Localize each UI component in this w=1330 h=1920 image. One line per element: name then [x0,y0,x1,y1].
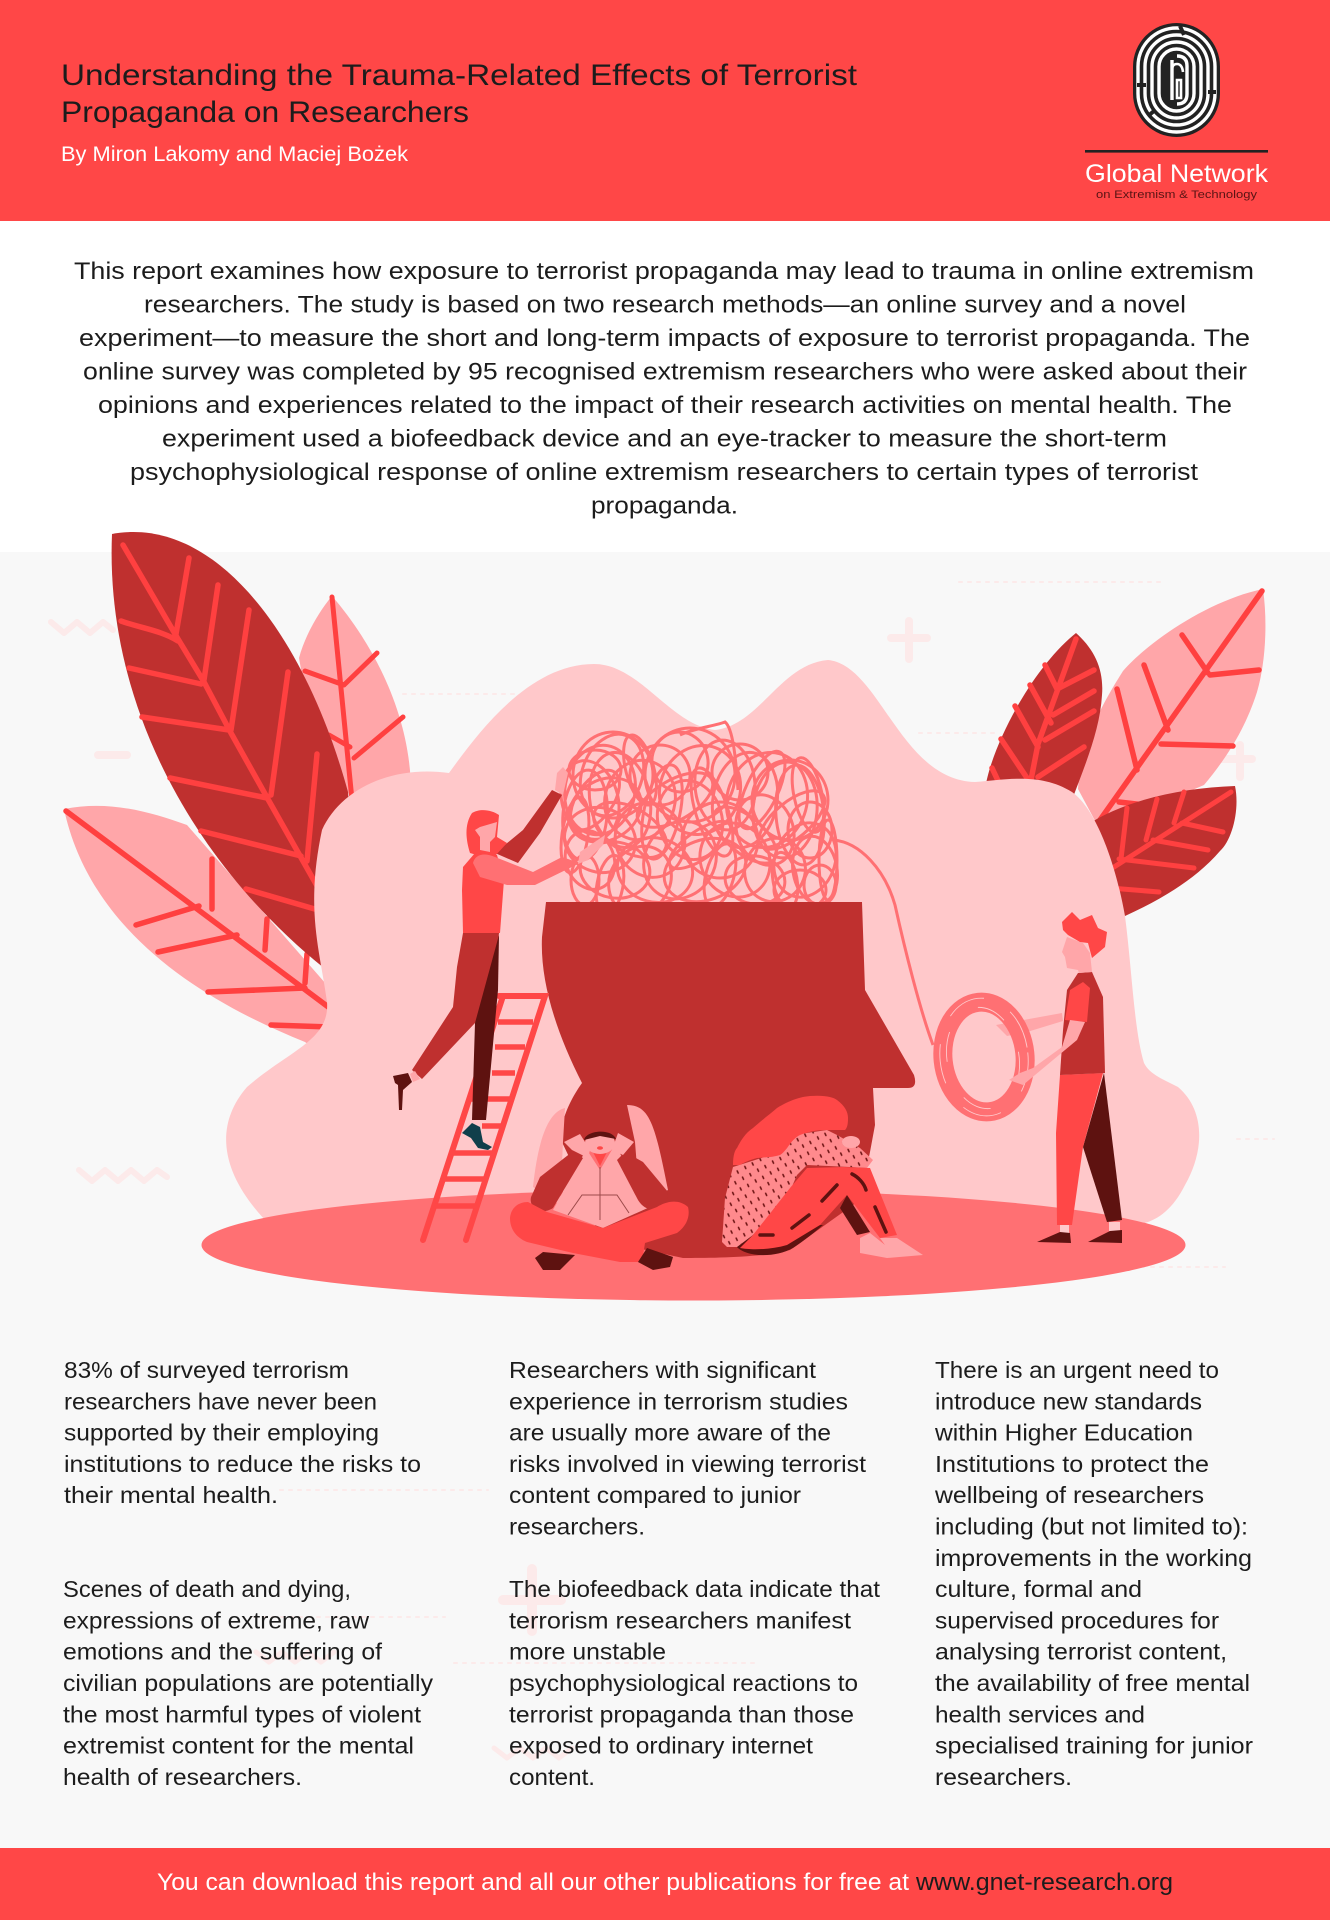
intro text block: opinions and experiences related to the impact of their research activities on mental health. The [98,392,1232,419]
finding: experience and awareness: risks involved in viewing terrorist [509,1451,867,1477]
text column 1 [63,1357,434,1790]
finding: experience and awareness: content compared to junior [509,1482,801,1508]
finding: institutional support [64,1357,421,1508]
front arm [473,855,580,885]
figure: sitting man [510,1105,689,1270]
text column 3: recommendation: within Higher Education [934,1420,1193,1446]
logo: Global Network on Extremism & Technology [1085,23,1269,201]
finding: institutional support: supported by their employing [64,1420,379,1446]
finding: experience and awareness: Researchers with significant [509,1357,817,1383]
head and hands [564,1134,590,1158]
finding: experience and awareness [509,1357,867,1540]
figure: sitting woman [722,1096,923,1258]
back leg [840,1195,870,1235]
finding: biofeedback data [509,1576,881,1790]
finding: harmful content: the most harmful types of violent [63,1701,422,1727]
legs [510,1202,689,1262]
finding: biofeedback data: more unstable [509,1639,666,1665]
finding: institutional support: researchers have never been [64,1388,377,1414]
finding: experience and awareness: experience in terrorism studies [509,1388,848,1414]
text column 3: recommendation: culture, formal and [935,1576,1142,1602]
footer band: www.gnet-research.org [915,1869,1173,1896]
finding: harmful content: extremist content for the mental [63,1733,414,1759]
intro text block: researchers. The study is based on two research methods—an online survey and a novel [144,292,1186,318]
torso [1060,972,1105,1075]
intro text block: psychophysiological response of online extremism researchers to certain types of terrorist [130,459,1198,486]
intro text block [74,258,1254,520]
leaf: pale lower left [64,806,340,1060]
byline: By Miron Lakomy and Maciej Bożek [61,143,409,166]
face [1062,937,1092,973]
finding: institutional support: institutions to reduce the risks to [64,1451,421,1477]
footer band [0,1848,1330,1920]
finding: harmful content: civilian populations are potentially [63,1670,434,1696]
trouser marks [760,1174,886,1235]
text column 2 [509,1357,881,1790]
leaf: pale right [1078,589,1265,830]
intro text block: This report examines how exposure to terrorist propaganda may lead to trauma in online extremism [74,258,1254,285]
finding: institutional support: 83% of surveyed terrorism [64,1357,349,1383]
intro text block: propaganda. [591,492,738,520]
hand [842,1136,860,1148]
jacket [553,1148,650,1228]
finding: institutional support: their mental health. [64,1482,278,1508]
logo: Global Network on Extremism & Technology: on Extremism & Technology [1096,189,1258,201]
back arm [996,1013,1063,1036]
finding: harmful content: expressions of extreme, raw [63,1607,369,1633]
intro text block: experiment used a biofeedback device and an eye-tracker to measure the short-term [162,426,1167,452]
title: Understanding the Trauma-Related Effects of Terrorist [61,59,858,92]
trousers [740,1167,897,1249]
finding: biofeedback data: content. [509,1764,595,1790]
header band [0,0,1330,221]
finding: harmful content: emotions and the suffering of [63,1639,383,1665]
shoes [535,1252,575,1270]
leaf: lower dark right [1085,786,1237,916]
text column 3: recommendation: analysing terrorist content, [935,1639,1227,1665]
leaf: small dark right [985,633,1102,800]
collar [587,1148,613,1170]
text column 3: recommendation: health services and [935,1701,1145,1727]
text column 3: recommendation: researchers. [935,1764,1072,1790]
face [475,822,497,852]
finding: biofeedback data: exposed to ordinary internet [509,1733,814,1759]
shoes [462,1123,492,1150]
figure: standing man with rope [934,912,1122,1243]
text column 3: recommendation: the availability of free mental [935,1670,1250,1696]
leaf: pale back left [299,596,411,800]
leaf: large dark left [112,532,360,968]
finding: harmful content: health of researchers. [63,1764,302,1790]
title: Propaganda on Researchers [61,96,469,129]
logo: Global Network on Extremism & Technology: Global Network [1085,160,1269,188]
ladder [423,996,545,1240]
dark leg [1083,1073,1122,1222]
text column 3: recommendation: There is an urgent need to [935,1357,1219,1383]
front arm [1009,1020,1085,1085]
finding: biofeedback data: psychophysiological reactions to [509,1670,858,1696]
finding: harmful content: Scenes of death and dying, [63,1576,351,1602]
text column 3: recommendation: introduce new standards [935,1388,1202,1414]
light leg [1056,1073,1103,1225]
text column 3: recommendation: improvements in the working [935,1545,1252,1571]
finding: harmful content [63,1576,434,1790]
text column 3: recommendation: wellbeing of researchers [934,1482,1204,1508]
rope tail [833,840,933,1045]
text column 3: recommendation: Institutions to protect the [935,1451,1209,1477]
feet [860,1233,923,1258]
back arm [495,790,562,863]
illustration [64,532,1265,1300]
rope coil [934,994,1034,1120]
pale hood [533,1105,668,1205]
tangled scribble [553,722,933,1045]
pink blob background [226,660,1199,1225]
finding: experience and awareness: researchers. [509,1514,645,1540]
finding: biofeedback data: terrorist propaganda than those [509,1701,854,1727]
hair [466,810,507,856]
text column 3: recommendation: supervised procedures for [935,1607,1219,1633]
torso [462,853,504,933]
dotted sweater [722,1130,873,1247]
sleeve [1065,982,1090,1022]
hair [733,1096,848,1165]
finding: biofeedback data: terrorism researchers manifest [509,1607,852,1633]
title [61,59,858,129]
legs [412,933,499,1079]
footer band: You can download this report and all our other publications for free at [157,1869,909,1896]
figure: woman on ladder [393,767,605,1150]
text column 3: recommendation: specialised training for junior [935,1733,1253,1759]
finding: biofeedback data: The biofeedback data indicate that [509,1576,881,1602]
finding: experience and awareness: are usually more aware of the [509,1420,831,1446]
ground ellipse [202,1190,1186,1300]
text column 3: recommendation: including (but not limited to): [935,1514,1248,1540]
intro text block: online survey was completed by 95 recognised extremism researchers who were asked about their [83,358,1247,386]
hair [1062,912,1107,958]
background faint decorations [51,582,1274,1758]
socks and shoes [1060,1222,1120,1233]
intro text block: experiment—to measure the short and long-term impacts of exposure to terrorist propaganda. The [79,325,1250,352]
text column 3: recommendation [934,1357,1253,1790]
head silhouette [542,902,915,1258]
shadow under hip [735,1225,823,1255]
hoodie seams [568,1167,629,1220]
arms [531,1152,583,1211]
